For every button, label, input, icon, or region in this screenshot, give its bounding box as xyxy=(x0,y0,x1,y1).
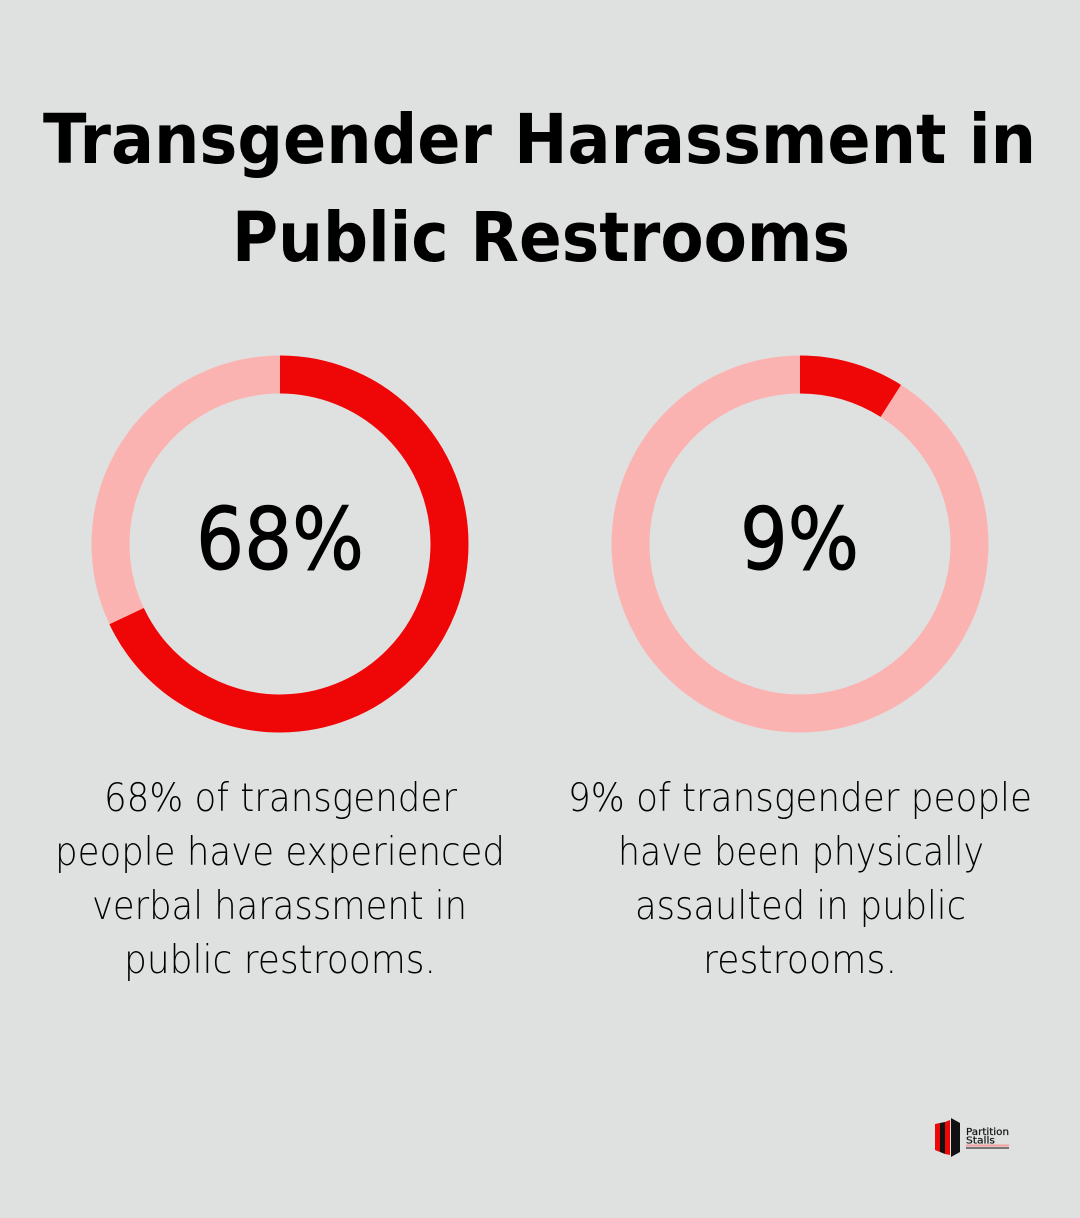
text block: 9% description: 9% of transgender people xyxy=(568,776,1032,821)
donut chart: 9%: 9% xyxy=(740,490,859,590)
text block: 68% description: people have experienced xyxy=(55,830,505,875)
donut chart: 9% xyxy=(630,374,970,714)
text block: 9% description: restrooms. xyxy=(703,938,897,983)
text block: 68% description: public restrooms. xyxy=(124,938,436,983)
wordmark xyxy=(966,1127,1009,1149)
icon: partition panels xyxy=(935,1118,960,1157)
title xyxy=(43,100,1036,278)
text block: 68% description: 68% of transgender xyxy=(104,776,457,821)
logo: Partition Stalls xyxy=(935,1118,1009,1157)
wordmark: Partition xyxy=(966,1127,1009,1138)
text block: 68% description xyxy=(55,776,505,983)
text block: 9% description: have been physically xyxy=(618,830,984,875)
title: Public Restrooms xyxy=(232,198,850,278)
text block: 68% description: verbal harassment in xyxy=(92,884,467,929)
donut chart: 68% xyxy=(110,374,450,714)
panel: 9% physical assault xyxy=(568,374,1032,983)
donut chart: 68%: 68% xyxy=(196,490,364,590)
text block: 9% description: assaulted in public xyxy=(635,884,966,929)
text block: 9% description xyxy=(568,776,1032,983)
panel: 68% verbal harassment xyxy=(55,374,505,983)
wordmark: Stalls xyxy=(966,1136,995,1146)
